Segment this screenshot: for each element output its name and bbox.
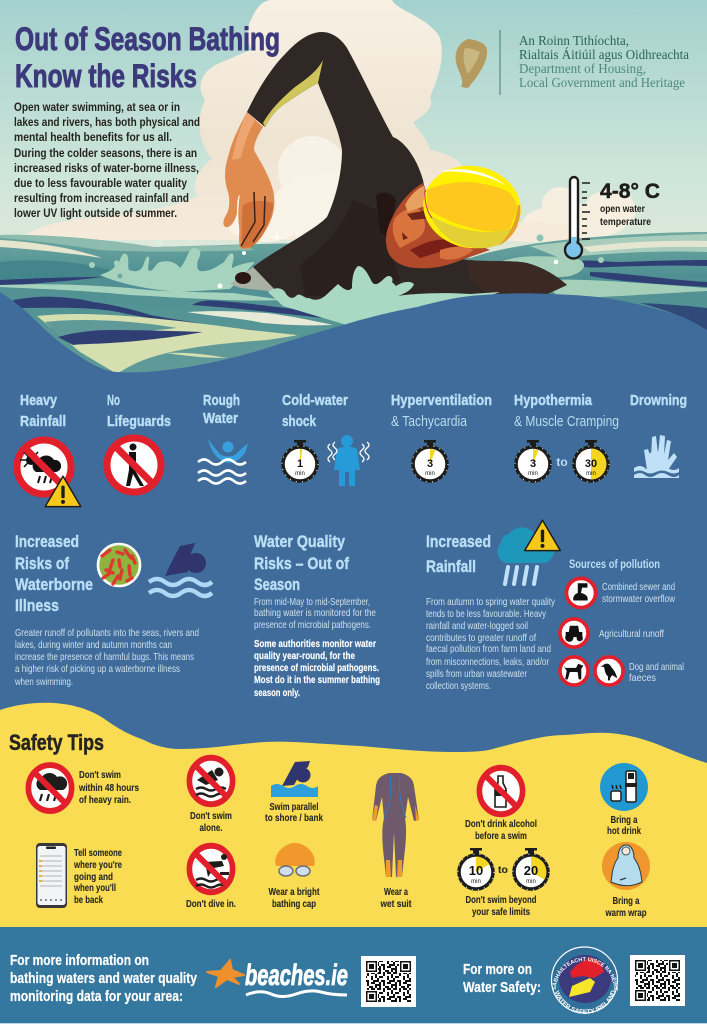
tip: tell someone: going and bbox=[74, 871, 113, 883]
icon: bacteria bbox=[98, 544, 140, 586]
water temperature label: temperature bbox=[600, 217, 651, 228]
tip: wet suit bbox=[372, 773, 419, 910]
QR code: beaches bbox=[361, 956, 416, 1007]
tip: don't swim alone bbox=[189, 758, 233, 834]
tip: no alcohol: before a swim bbox=[475, 830, 527, 842]
droplets bbox=[89, 234, 604, 292]
source: sewer overflow bbox=[566, 578, 675, 608]
panel: increased rainfall bbox=[426, 520, 684, 692]
tip: safe limits: 10 bbox=[469, 863, 483, 878]
intro text: Open water swimming, at sea or in bbox=[14, 100, 180, 114]
body text: when swimming. bbox=[14, 676, 73, 688]
tip: don't swim after heavy rain: Don't swim bbox=[79, 769, 121, 781]
bold note: Most do it in the summer bathing bbox=[254, 674, 380, 686]
wetsuit body and arm bbox=[247, 32, 567, 302]
icon: phone bbox=[36, 843, 67, 908]
tip: tell someone: Tell someone bbox=[74, 847, 122, 859]
icon: rain cloud with warning bbox=[497, 520, 560, 584]
footer text: water safety: Water Safety: bbox=[463, 979, 541, 996]
body text: rainfall and water-logged soil bbox=[426, 620, 528, 632]
tip: don't swim alone: alone. bbox=[200, 822, 223, 834]
tip: swim parallel bbox=[265, 761, 323, 824]
tip: tell someone bbox=[36, 843, 122, 908]
tip: don't swim after heavy rain: within 48 hours bbox=[78, 782, 139, 794]
risk: hypothermia: min bbox=[528, 471, 538, 477]
tip: bright bathing cap bbox=[268, 843, 320, 910]
risk: heavy rainfall: Rainfall bbox=[20, 413, 66, 430]
department name: Local Government and Heritage bbox=[519, 76, 685, 91]
heading: Increased bbox=[426, 532, 491, 551]
wrist shadow and grey tip bbox=[230, 267, 277, 292]
risk: cold-water shock: shock bbox=[282, 413, 317, 430]
heading: Risks – Out of bbox=[254, 554, 349, 573]
heading bbox=[254, 532, 349, 594]
sources of pollution bbox=[560, 557, 684, 685]
tip: tell someone: when you'll bbox=[73, 882, 116, 894]
risk: no lifeguards bbox=[107, 392, 171, 492]
risk: no lifeguards: Lifeguards bbox=[107, 413, 171, 430]
bold note: season only. bbox=[254, 687, 300, 699]
intro text: mental health benefits for us all. bbox=[14, 130, 172, 144]
risk: heavy rainfall: Heavy bbox=[20, 392, 58, 409]
risk: cold-water shock: 1 bbox=[297, 458, 303, 470]
splash over swimmer bbox=[268, 266, 500, 326]
footer text: water safety bbox=[463, 961, 541, 996]
risk: heavy rainfall bbox=[17, 392, 81, 507]
body text: spills from urban wastewater bbox=[426, 668, 527, 680]
tip: don't dive in bbox=[186, 846, 236, 910]
body text: contributes to greater runoff of bbox=[426, 632, 536, 644]
footer text: more information bbox=[10, 952, 198, 1005]
risk: hyperventilation: Hyperventilation bbox=[391, 392, 492, 409]
risk: cold-water shock: min bbox=[295, 471, 305, 477]
tip: warm wrap bbox=[602, 842, 650, 919]
risk: rough water bbox=[198, 392, 248, 484]
risk: hypothermia: 3 bbox=[530, 458, 536, 470]
body text bbox=[426, 596, 556, 692]
intro text: increased risks of water-borne illness, bbox=[14, 161, 199, 175]
clouds bbox=[20, 0, 636, 242]
source: dog and animal faeces: faeces bbox=[629, 672, 656, 684]
bold note: quality year-round, for the bbox=[254, 650, 355, 662]
face bbox=[386, 183, 490, 268]
blue wave panel bbox=[0, 292, 707, 1024]
source: dog and animal faeces bbox=[560, 657, 684, 685]
intro text: lower UV light outside of summer. bbox=[14, 206, 177, 220]
body text bbox=[254, 596, 376, 631]
tip: tell someone: where you're bbox=[73, 859, 122, 871]
heading bbox=[15, 532, 93, 615]
icon: harp emblem bbox=[456, 39, 487, 88]
body text: faecal pollution from farm land and bbox=[426, 643, 551, 655]
logo: beaches.ie bbox=[207, 959, 348, 996]
body text: bathing water is monitored for the bbox=[254, 607, 376, 619]
heading: Increased bbox=[15, 532, 79, 551]
tip: hot drink: Bring a bbox=[610, 814, 638, 826]
tip: bright bathing cap: Wear a bright bbox=[268, 886, 320, 898]
intro text: lakes and rivers, has both physical and bbox=[14, 115, 200, 129]
heading bbox=[426, 532, 491, 576]
tip: swim parallel: Swim parallel bbox=[270, 801, 319, 813]
panel: sky background bbox=[0, 0, 707, 330]
risk: rough water: Water bbox=[203, 410, 238, 427]
QR code: water safety bbox=[630, 955, 685, 1006]
heading: Risks of bbox=[15, 554, 69, 573]
water temperature label bbox=[600, 180, 660, 228]
logo: water safety ireland: SÁBHÁILTEACHT UISCE NA hÉIREANN bbox=[552, 957, 618, 991]
department name: Rialtais Áitiúil agus Oidhreachta bbox=[519, 46, 690, 63]
tip: safe limits: 20 bbox=[524, 863, 538, 878]
risk: drowning bbox=[630, 392, 687, 478]
icon: swimmer in waves bbox=[149, 543, 212, 596]
body text: presence of microbial pathogens. bbox=[254, 619, 371, 631]
body text: lakes, during winter and autumn months can bbox=[15, 639, 172, 651]
logo: water safety ireland: WATER SAFETY IRELAND bbox=[555, 990, 615, 1014]
department name: Department of Housing, bbox=[519, 62, 646, 77]
source: agricultural runoff: Agricultural runoff bbox=[599, 628, 664, 640]
bold note bbox=[254, 638, 380, 699]
illustration: swimmer bbox=[223, 32, 567, 302]
intro text: During the colder seasons, there is an bbox=[14, 146, 197, 160]
tip: hot drink: hot drink bbox=[607, 825, 641, 837]
risk: hypothermia: to bbox=[556, 455, 568, 469]
body text: collection systems. bbox=[426, 680, 491, 692]
tip: don't dive in: Don't dive in. bbox=[186, 898, 236, 910]
risk: hypothermia: & Muscle Cramping bbox=[514, 413, 619, 430]
body text: tends to be less favourable. Heavy bbox=[426, 608, 547, 620]
heading: Rainfall bbox=[426, 557, 476, 576]
tip: safe limits: min bbox=[471, 879, 481, 885]
source: dog and animal faeces: Dog and animal bbox=[629, 661, 684, 673]
risk: hypothermia: Hypothermia bbox=[514, 392, 593, 409]
tip: wet suit: Wear a bbox=[384, 886, 408, 898]
body text: From autumn to spring water quality bbox=[426, 596, 556, 608]
intro text: due to less favourable water quality bbox=[14, 176, 187, 190]
bold note: presence of microbial pathogens. bbox=[254, 662, 379, 674]
sources of pollution: Sources of pollution bbox=[569, 557, 660, 571]
footer text: water safety: For more on bbox=[463, 961, 532, 978]
panel: risk factors row bbox=[17, 392, 687, 507]
heading: Water Quality bbox=[254, 532, 345, 551]
swim cap bbox=[417, 158, 527, 256]
risk: hyperventilation: 3 bbox=[427, 458, 433, 470]
tip: safe limits: Don't swim beyond bbox=[466, 894, 536, 906]
body text: from misconnections, leaks, and/or bbox=[426, 656, 549, 668]
risk: hyperventilation bbox=[391, 392, 492, 482]
footer text: more information: monitoring data for your area: bbox=[10, 988, 183, 1005]
body text: a higher risk of picking up a waterborne illness bbox=[15, 663, 180, 675]
heading: Waterborne bbox=[15, 575, 93, 594]
footer text: more information: bathing waters and water quality bbox=[10, 970, 198, 987]
body text bbox=[14, 627, 199, 688]
heading: Illness bbox=[15, 596, 59, 615]
intro text bbox=[14, 100, 200, 220]
tip: swim parallel: to shore / bank bbox=[265, 812, 323, 824]
tip: warm wrap: Bring a bbox=[612, 895, 640, 907]
risk: cold-water shock: Cold-water bbox=[282, 392, 348, 409]
heading: Season bbox=[254, 575, 300, 594]
title bbox=[15, 21, 280, 94]
body text: Greater runoff of pollutants into the seas, rivers and bbox=[15, 627, 199, 639]
department name: An Roinn Tithíochta, bbox=[519, 34, 629, 49]
bold note: Some authorities monitor water bbox=[254, 638, 376, 650]
logo: beaches.ie: beaches.ie bbox=[245, 959, 348, 992]
risk: drowning: Drowning bbox=[630, 392, 687, 409]
title: Out of Season Bathing bbox=[15, 21, 280, 57]
panel: water quality risks bbox=[254, 532, 380, 699]
panel: increased risks of waterborne illness bbox=[14, 532, 212, 688]
risk: rough water: Rough bbox=[203, 392, 240, 409]
tip: hot drink bbox=[600, 763, 648, 837]
tip: no alcohol bbox=[465, 768, 537, 842]
splash left bbox=[100, 248, 255, 292]
risk: hyperventilation: min bbox=[425, 471, 435, 477]
heading: safety tips: Safety Tips bbox=[9, 730, 104, 755]
tip: safe limits: your safe limits bbox=[472, 906, 530, 918]
icon: thermometer bbox=[565, 177, 590, 258]
tip: tell someone: be back bbox=[74, 894, 103, 906]
water temperature label: 4-8° C bbox=[600, 180, 660, 203]
risk: hypothermia: 30 bbox=[585, 458, 597, 470]
tip: bright bathing cap: bathing cap bbox=[272, 898, 316, 910]
sleeve lining bbox=[263, 60, 323, 127]
intro text: resulting from increased rainfall and bbox=[14, 191, 189, 205]
hand bbox=[223, 112, 274, 249]
water temperature label: open water bbox=[600, 204, 645, 215]
risk: hypothermia: min bbox=[586, 471, 596, 477]
department name bbox=[500, 30, 690, 95]
risk: hypothermia bbox=[514, 392, 619, 482]
risk: hyperventilation: & Tachycardia bbox=[391, 413, 468, 430]
tip: warm wrap: warm wrap bbox=[605, 907, 646, 919]
risk: no lifeguards: No bbox=[107, 392, 120, 409]
source: sewer overflow: stormwater overflow bbox=[602, 593, 675, 605]
body text: increase the presence of harmful bugs. This means bbox=[15, 651, 194, 663]
splash right bbox=[500, 256, 584, 277]
tip: no alcohol: Don't drink alcohol bbox=[465, 818, 537, 830]
tip: don't swim after heavy rain: of heavy rain. bbox=[79, 794, 131, 806]
tip: safe limits: min bbox=[526, 879, 536, 885]
footer text: more information: For more information on bbox=[10, 952, 149, 969]
panel: sea illustration bbox=[0, 232, 707, 380]
tip: wet suit: wet suit bbox=[380, 898, 412, 910]
tip: safe limits: to bbox=[498, 864, 508, 876]
body text: From mid-May to mid-September, bbox=[254, 596, 370, 608]
title: Know the Risks bbox=[15, 58, 197, 94]
tip: don't swim after heavy rain bbox=[28, 765, 139, 811]
tip: don't swim alone: Don't swim bbox=[190, 810, 232, 822]
panel: safety tips background bbox=[0, 703, 707, 928]
source: sewer overflow: Combined sewer and bbox=[602, 581, 675, 593]
tip: safe limits bbox=[458, 848, 549, 918]
risk: cold-water shock bbox=[282, 392, 369, 486]
